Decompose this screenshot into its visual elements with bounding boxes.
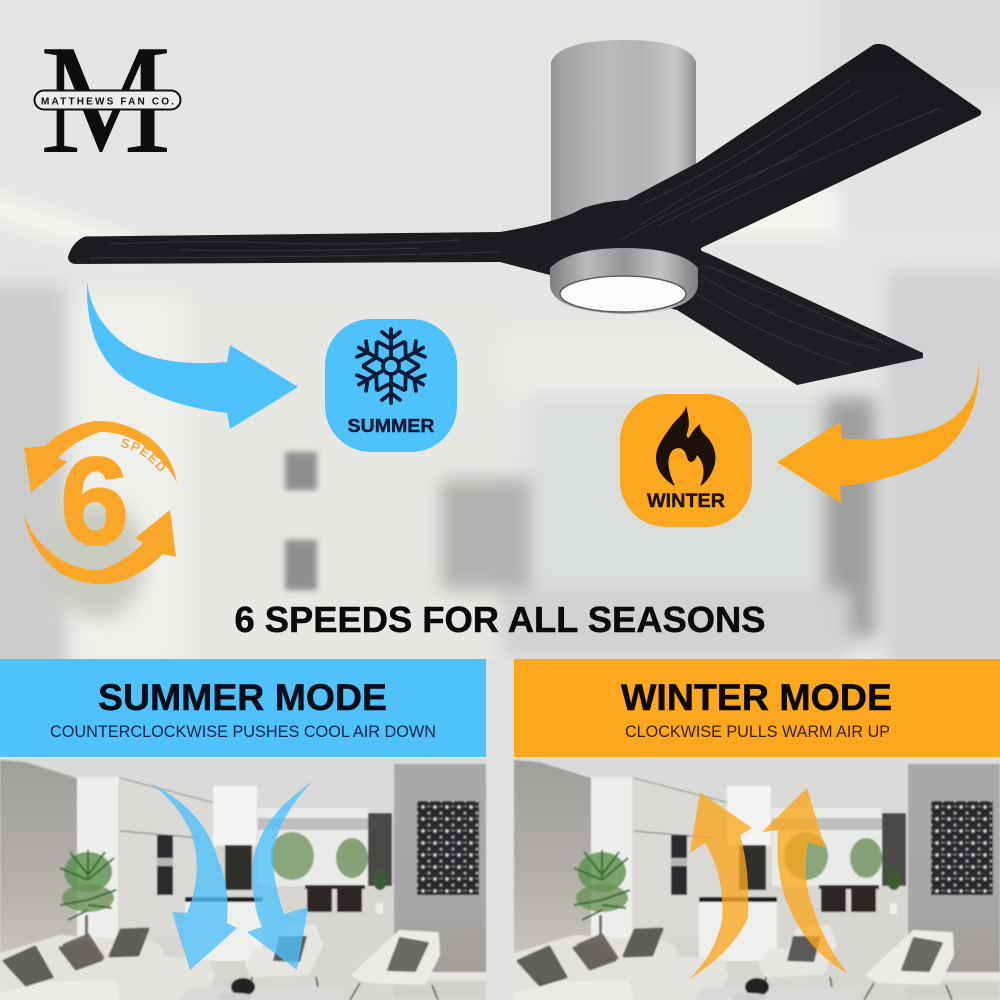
icon: snowflake xyxy=(352,329,430,403)
winter heading: WINTER MODE xyxy=(621,677,892,718)
arrow: orange to winter xyxy=(777,360,979,503)
top rotation arrow xyxy=(24,421,177,493)
warm air arrows xyxy=(688,788,847,980)
main heading: 6 SPEEDS FOR ALL SEASONS xyxy=(234,599,766,640)
summer subheading: COUNTERCLOCKWISE PUSHES COOL AIR DOWN xyxy=(50,723,436,741)
panel: winter mode xyxy=(514,659,1000,757)
light housing ring xyxy=(550,248,698,314)
logo: Matthews Fan Co.: MATTHEWS FAN CO. xyxy=(41,96,174,108)
logo: Matthews Fan Co.: M xyxy=(40,12,171,186)
winter badge xyxy=(620,394,752,527)
speed badge: SPEED xyxy=(121,438,166,471)
summer badge: SUMMER xyxy=(348,415,434,436)
room photo: winter xyxy=(514,758,1000,1000)
summer badge xyxy=(325,319,457,452)
room photo: summer xyxy=(0,758,486,1000)
ceiling fan xyxy=(68,40,981,385)
LED light xyxy=(560,276,686,312)
fan motor housing xyxy=(551,40,696,240)
winter badge: WINTER xyxy=(647,491,725,512)
panel: summer mode xyxy=(0,659,486,757)
bottom rotation arrow xyxy=(24,510,176,584)
arrow: blue to summer xyxy=(87,281,298,429)
cool air arrows xyxy=(150,782,312,970)
left and right blades xyxy=(68,44,981,385)
winter subheading: CLOCKWISE PULLS WARM AIR UP xyxy=(625,723,890,741)
speed label xyxy=(120,447,167,484)
speed badge xyxy=(24,421,177,584)
summer heading: SUMMER MODE xyxy=(98,677,387,718)
icon: flame xyxy=(656,405,715,486)
numeral six: 6 xyxy=(60,433,129,571)
